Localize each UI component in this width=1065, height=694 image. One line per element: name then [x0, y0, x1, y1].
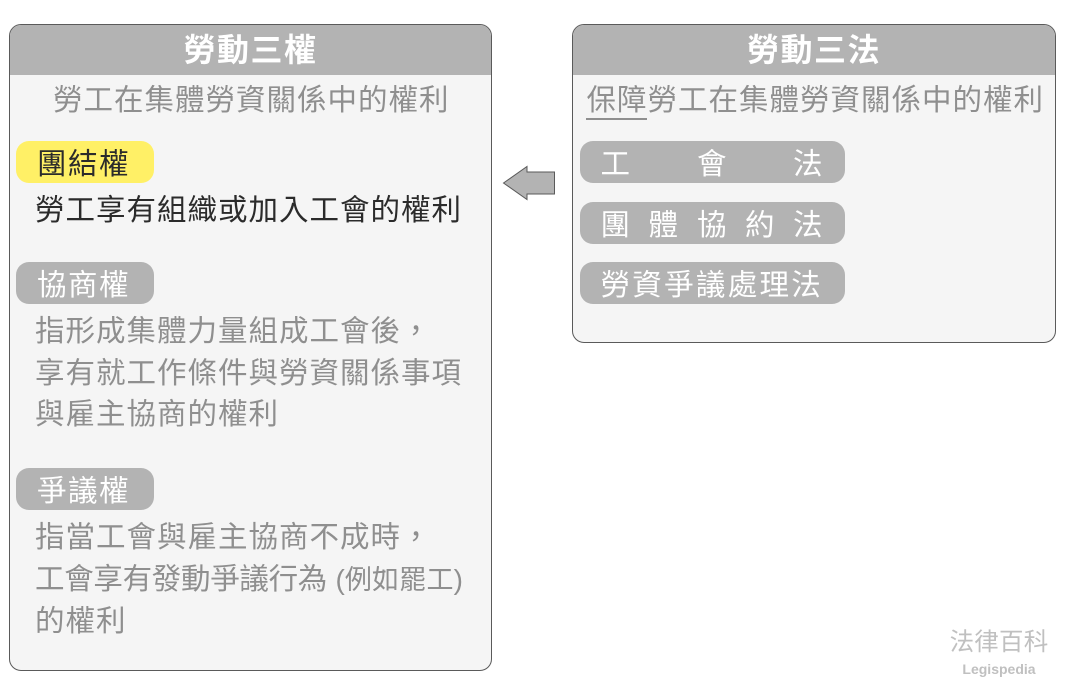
text: 團結權 description: 勞工享有組織或加入工會的權利 — [35, 194, 462, 227]
pill: 團結權 — [16, 141, 154, 183]
arrow: pointing left — [502, 166, 555, 200]
subtitle: protection of workers: 保障勞工在集體勞資關係中的權利 — [586, 84, 1044, 117]
pill: 團體協約法 — [580, 202, 845, 244]
pill: 勞資爭議處理法: 勞資爭議處理法 — [600, 269, 823, 302]
underline: 保障 — [586, 118, 647, 120]
heading: 勞動三權: 勞動三權 — [183, 32, 318, 68]
text: 爭議權 description: 的權利 — [35, 605, 127, 638]
pill: 工會法: 會 — [697, 148, 727, 181]
heading: 勞動三法: 勞動三法 — [747, 32, 881, 68]
pill: 工會法 — [580, 141, 845, 183]
heading: 勞動三法 — [573, 25, 1055, 75]
pill: 團結權: 團結權 — [37, 148, 130, 181]
text: 協商權 description: 享有就工作條件與勞資關係事項 — [35, 356, 462, 390]
text: 協商權 description: 與雇主協商的權利 — [35, 398, 279, 431]
logo: 法律百科 Legispedia: Legispedia — [962, 661, 1036, 677]
logo: 法律百科 Legispedia: 法律百科 — [950, 629, 1048, 656]
pill: 團體協約法: 團 — [600, 209, 630, 242]
text: 爭議權 description: 指當工會與雇主協商不成時， — [35, 521, 432, 554]
pill: 爭議權 — [16, 468, 154, 510]
logo: 法律百科 Legispedia — [950, 629, 1048, 677]
text: 爭議權 description: 工會享有發動爭議行為 (例如罷工) — [35, 562, 463, 596]
pill: 團體協約法: 體 — [648, 209, 678, 242]
text: 爭議權 description — [35, 521, 463, 638]
panel: 勞動三法 — [572, 24, 1056, 343]
pill: 團體協約法: 約 — [745, 209, 775, 242]
text: 協商權 description: 指形成集體力量組成工會後， — [35, 315, 432, 348]
pill: 團體協約法: 協 — [697, 209, 727, 242]
heading: 勞動三權 — [10, 25, 491, 75]
pill: 爭議權: 爭議權 — [37, 475, 130, 508]
text: 協商權 description — [35, 315, 462, 431]
pill: 協商權 — [16, 262, 154, 304]
pill: 工會法: 工 — [600, 148, 630, 181]
pill: 勞資爭議處理法 — [580, 262, 845, 304]
pill: 工會法: 法 — [793, 148, 823, 181]
pill: 團體協約法: 法 — [793, 209, 823, 242]
pill: 協商權: 協商權 — [37, 269, 130, 302]
subtitle: rights of workers: 勞工在集體勞資關係中的權利 — [53, 84, 450, 117]
panel: 勞動三權 — [9, 24, 492, 671]
